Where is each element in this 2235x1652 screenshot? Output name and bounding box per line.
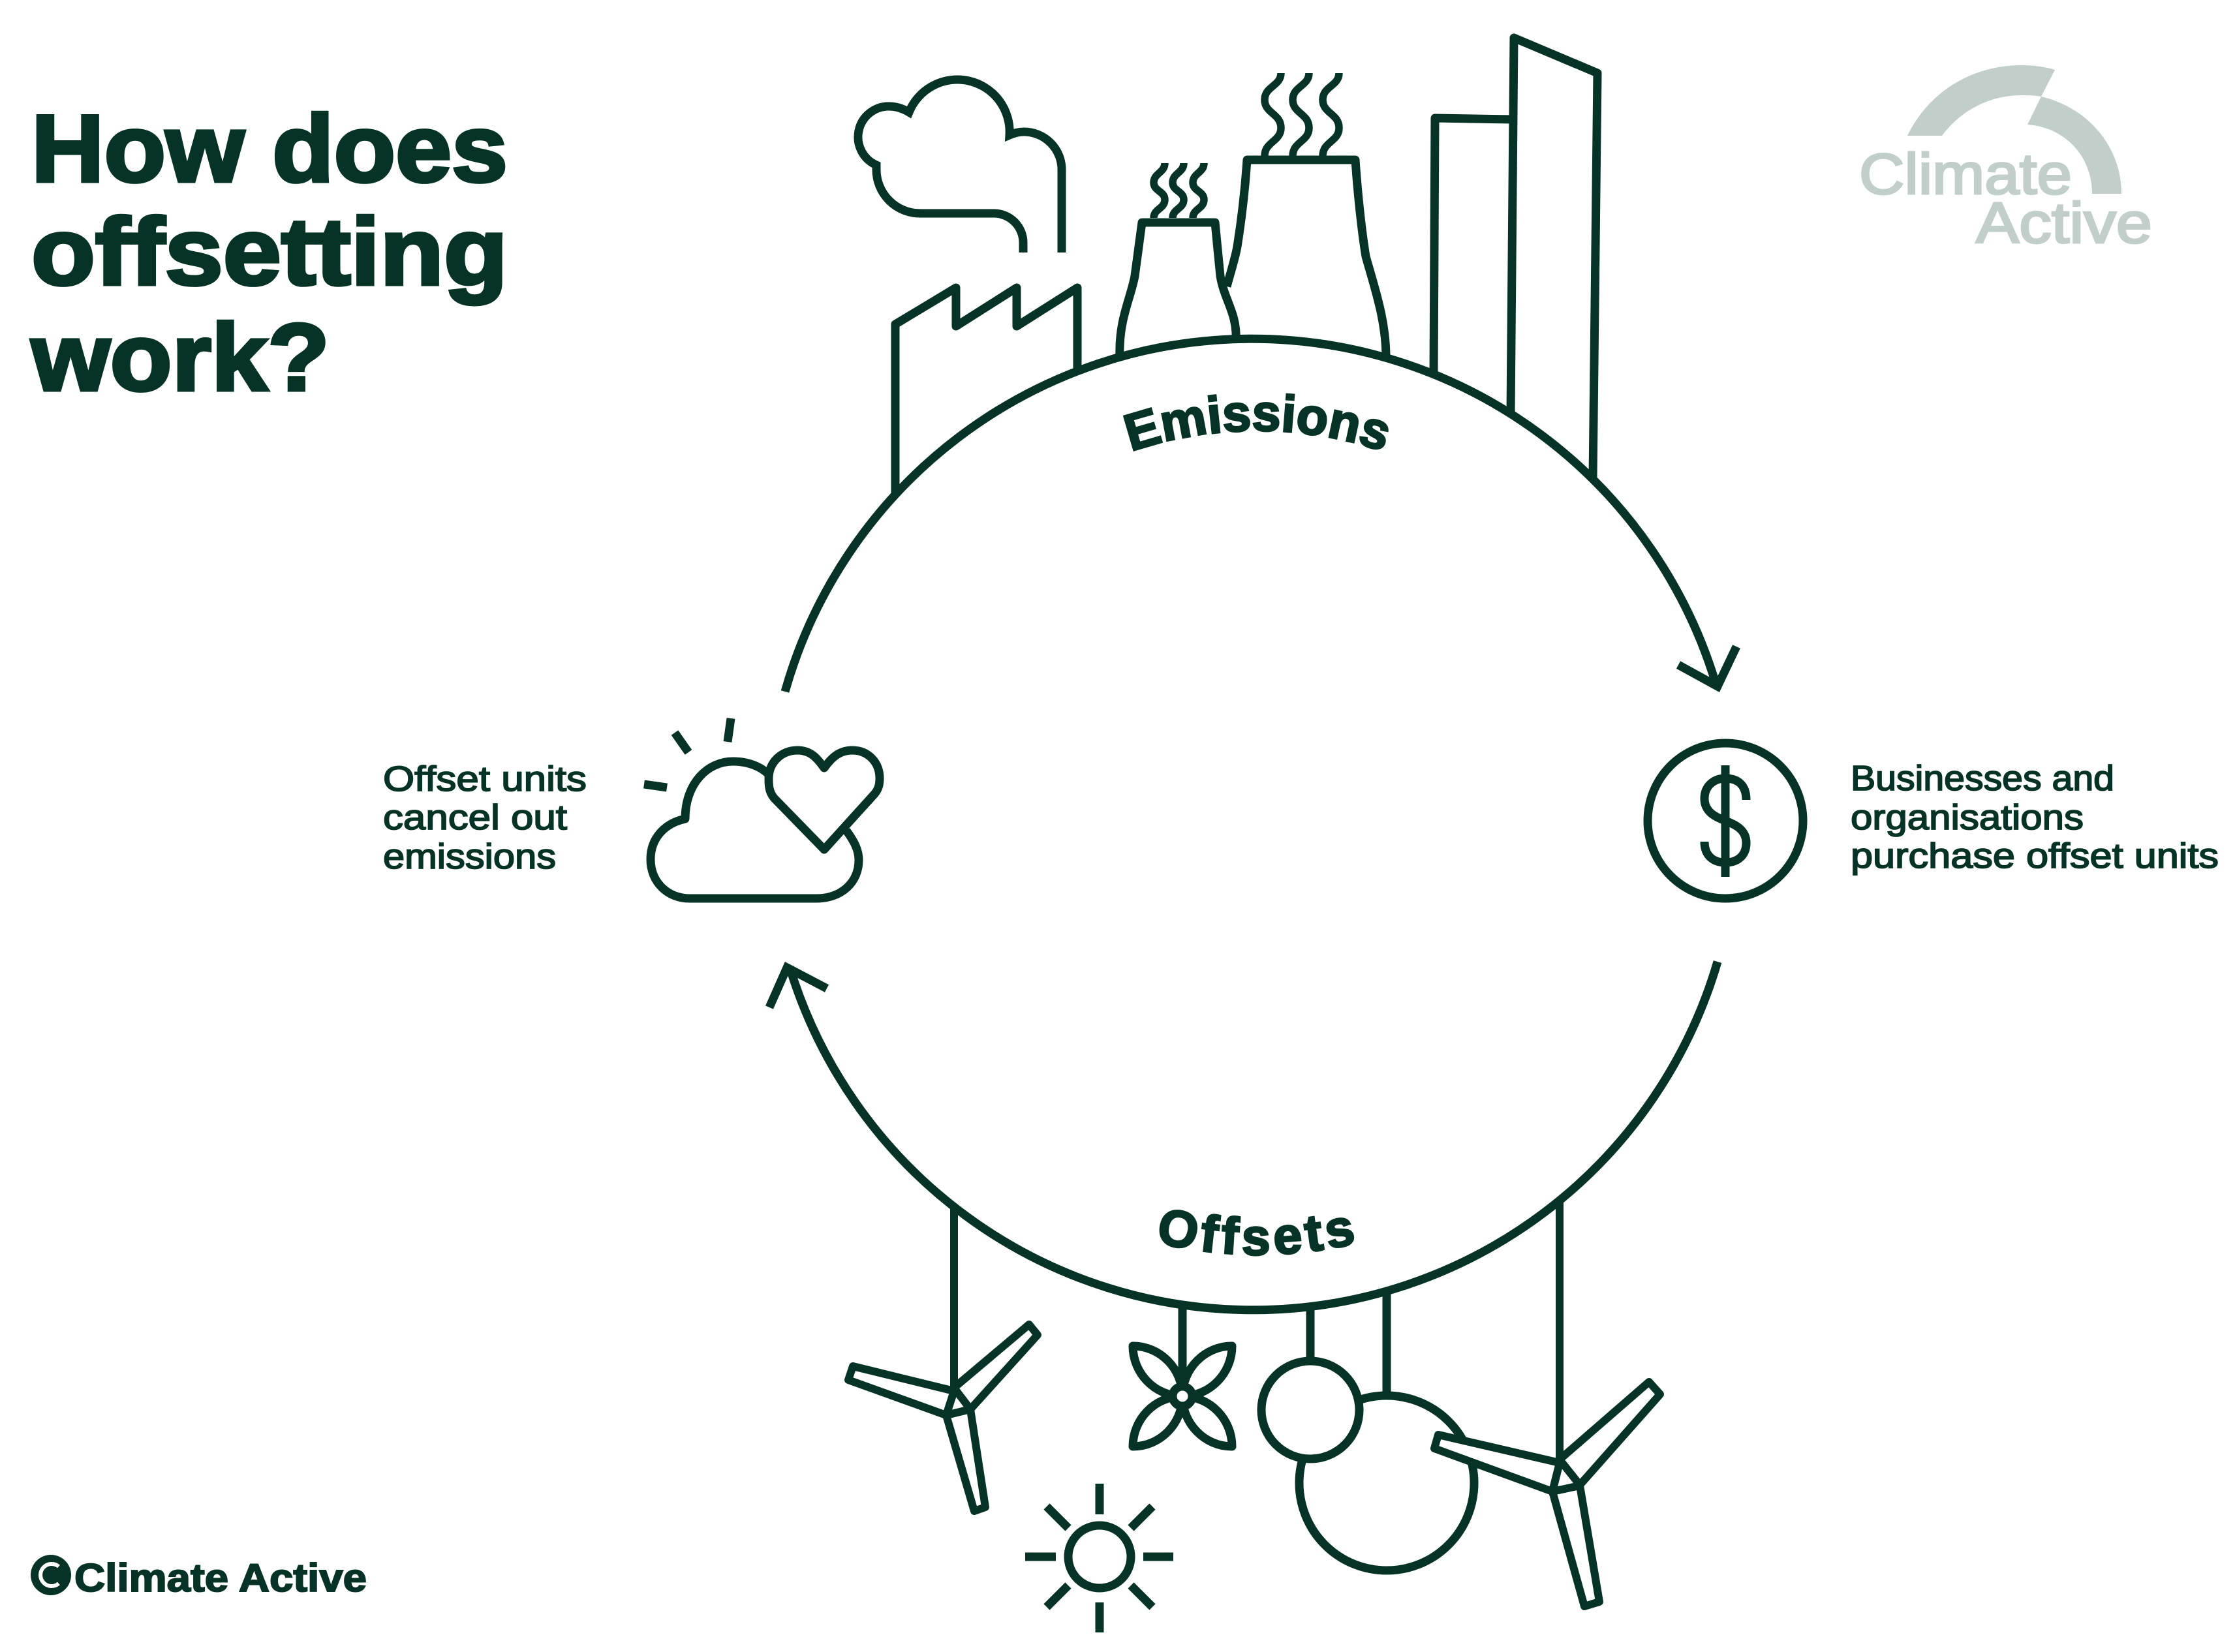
label: offset units cancel out emissions: emissions bbox=[383, 837, 556, 876]
logo: Climate Active footer: Climate Active bbox=[74, 1556, 367, 1600]
label: offset units cancel out emissions bbox=[383, 759, 587, 876]
title bbox=[31, 95, 508, 410]
logo: Climate Active watermark: Climate bbox=[1859, 142, 2072, 206]
logo: Climate Active watermark: Active bbox=[1976, 191, 2152, 255]
label: businesses purchase offset units: organisations bbox=[1851, 798, 2084, 837]
icon: smoke cloud from chimney bbox=[858, 80, 1062, 252]
label: businesses purchase offset units bbox=[1851, 759, 2219, 876]
icon: large tree canopy bbox=[1299, 1293, 1474, 1570]
label: Offsets: Offsets bbox=[1159, 1210, 1355, 1257]
icon: sun bbox=[1025, 1484, 1173, 1632]
icon: dollar coin bbox=[1648, 743, 1803, 898]
icon: factory bbox=[895, 288, 1077, 496]
icon: left wind turbine bbox=[848, 1207, 1038, 1511]
icon: cloud with heart and sun rays bbox=[644, 718, 880, 898]
label: businesses purchase offset units: purchase offset units bbox=[1851, 836, 2219, 876]
icon: small cooling tower bbox=[1120, 163, 1236, 358]
arrow: lower arc from purchase to offset units bbox=[769, 962, 1718, 1310]
icon: large cooling tower bbox=[1227, 73, 1386, 358]
title: work? bbox=[31, 304, 330, 410]
icon: right wind turbine bbox=[1434, 1201, 1660, 1606]
label: businesses purchase offset units: Businesses and bbox=[1851, 759, 2114, 798]
icon: skyscrapers bbox=[1434, 38, 1597, 478]
logo: Climate Active watermark bbox=[1859, 65, 2152, 255]
arrow: upper arc from offset units to purchase bbox=[785, 339, 1736, 692]
title: How does bbox=[31, 95, 508, 202]
label: Emissions: Emissions bbox=[1122, 393, 1389, 451]
icon: small tree canopy bbox=[1261, 1307, 1359, 1459]
label: offset units cancel out emissions: cancel out bbox=[383, 798, 567, 837]
icon: flower bbox=[1133, 1307, 1232, 1446]
title: offsetting bbox=[31, 198, 508, 305]
label: offset units cancel out emissions: Offset units bbox=[383, 759, 587, 799]
